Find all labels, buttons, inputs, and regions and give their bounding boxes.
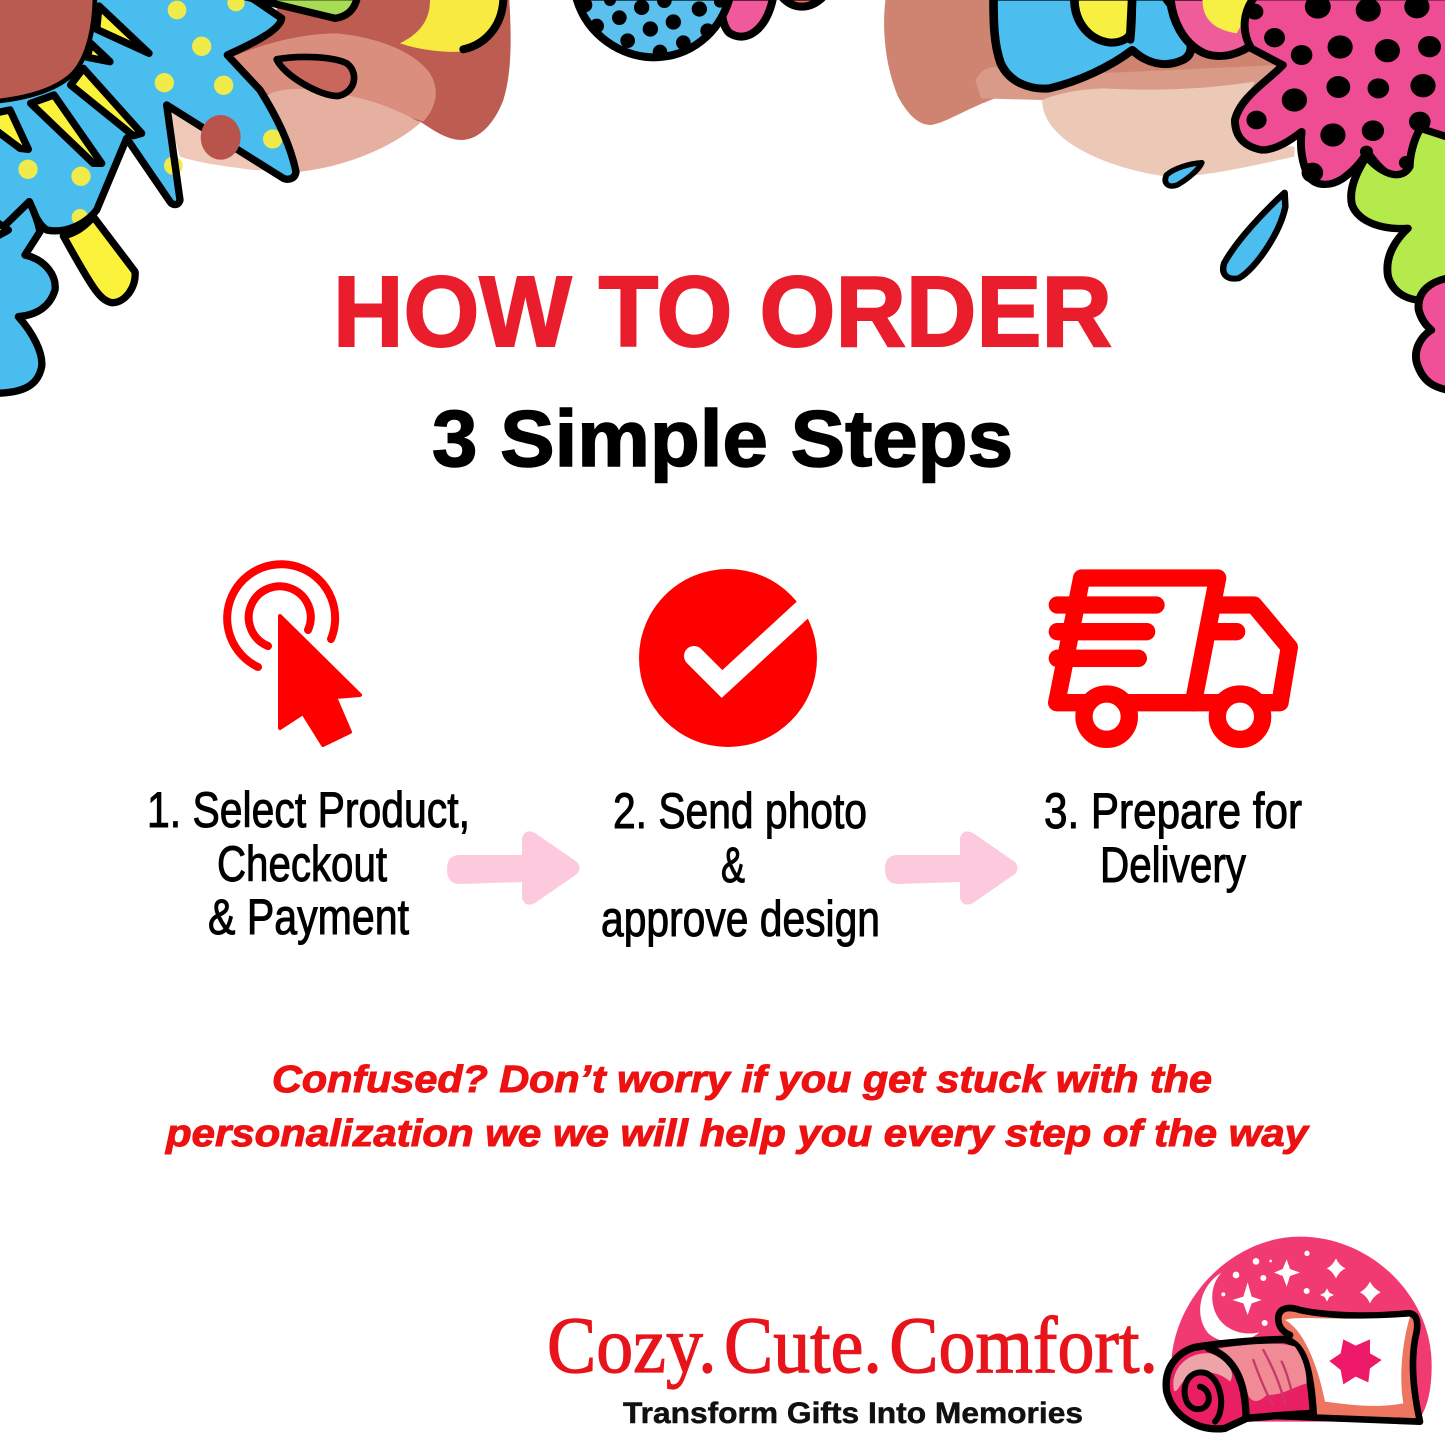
step 1 text bbox=[147, 782, 470, 945]
reassurance note bbox=[165, 1059, 1310, 1155]
step 3 text: 3. Prepare for bbox=[1044, 783, 1302, 839]
blue drop large bbox=[1223, 193, 1285, 279]
step 2 text: approve design bbox=[601, 891, 880, 947]
step 3 text: Delivery bbox=[1100, 837, 1246, 893]
paint drop bbox=[277, 57, 354, 96]
decoration: top left paint splash bbox=[0, 0, 511, 393]
yellow spikes bbox=[0, 6, 149, 303]
night dome bbox=[1172, 1237, 1432, 1422]
green shape bbox=[245, 0, 357, 18]
green blob bbox=[1351, 128, 1445, 300]
pillow bbox=[1250, 1308, 1420, 1422]
crescent moon bbox=[1200, 1273, 1259, 1342]
blue drop small bbox=[1165, 163, 1202, 186]
decoration: top centre dotted ball bbox=[576, 0, 823, 59]
step 2 text: & bbox=[721, 837, 745, 893]
icon: click cursor bbox=[227, 564, 360, 745]
brown spot bbox=[201, 115, 241, 160]
reassurance note: Confused? Don’t worry if you get stuck with the bbox=[272, 1059, 1212, 1101]
small pink shape bbox=[1170, 0, 1262, 56]
blue splat fill bbox=[0, 0, 296, 237]
step 2 text: 2. Send photo bbox=[613, 783, 867, 839]
rolled blanket bbox=[1166, 1339, 1313, 1429]
stars bbox=[1221, 1251, 1381, 1326]
lower blue blob bbox=[0, 202, 55, 393]
step 3 text bbox=[1044, 783, 1302, 893]
reassurance note: personalization we we will help you every step of the way bbox=[165, 1113, 1310, 1155]
icon: delivery truck bbox=[1057, 578, 1289, 739]
decoration: top right paint splash bbox=[884, 0, 1445, 392]
brand wordmark: Cozy. Cute. Comfort. bbox=[547, 1302, 1158, 1390]
blue shape bbox=[994, 0, 1191, 89]
subtitle: 3 Simple Steps bbox=[432, 394, 1013, 483]
step 1 text: 1. Select Product, bbox=[147, 782, 470, 838]
brand tagline: Transform Gifts Into Memories bbox=[623, 1397, 1083, 1430]
brown corner blob bbox=[0, 0, 95, 102]
icon: check circle bbox=[639, 569, 817, 747]
pillow star bbox=[1329, 1339, 1382, 1384]
arrow 1 bbox=[447, 831, 580, 905]
logo: blanket and pillow bbox=[1166, 1237, 1432, 1429]
yellow shape bbox=[400, 0, 503, 52]
yellow dots bbox=[18, 0, 282, 226]
lower pink blob bbox=[1416, 277, 1445, 392]
step 1 text: & Payment bbox=[208, 889, 409, 945]
pink dotted splat bbox=[1235, 0, 1445, 184]
arrow 2 bbox=[885, 831, 1018, 905]
yellow shape bbox=[1074, 0, 1132, 43]
title: HOW TO ORDER bbox=[333, 256, 1112, 368]
black dots bbox=[1246, 0, 1441, 183]
blue splat outline bbox=[0, 0, 296, 237]
step 2 text bbox=[601, 783, 880, 947]
step 1 text: Checkout bbox=[217, 836, 387, 892]
